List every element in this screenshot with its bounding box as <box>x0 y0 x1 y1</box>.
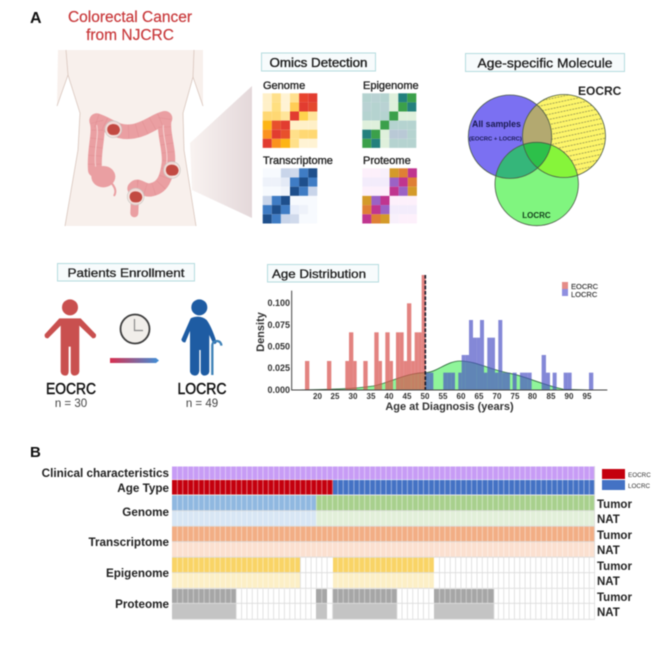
x axis labels: 60 <box>457 392 466 401</box>
label: LOCRC count <box>178 381 226 410</box>
axes <box>292 291 607 390</box>
row labels right: NAT <box>597 545 620 557</box>
chart legend <box>562 282 599 299</box>
x axis labels: 70 <box>493 392 502 401</box>
heading: Age-specific Molecule: Age-specific Molecule <box>478 56 612 70</box>
chart legend: EOCRC <box>571 282 599 291</box>
icon: elderly patient <box>181 299 221 376</box>
x axis labels: 85 <box>547 392 556 401</box>
omics labels: Transcriptome <box>263 155 333 167</box>
row labels left: Clinical characteristics <box>42 467 169 480</box>
row labels left: Transcriptome <box>88 536 169 549</box>
heading: Age Distribution: Age Distribution <box>272 267 366 281</box>
row labels right <box>597 499 632 619</box>
omics labels: Epigenome <box>363 80 419 92</box>
venn diagram: LOCRC <box>522 211 551 220</box>
x axis labels: 50 <box>421 392 430 401</box>
x axis labels: 55 <box>439 392 448 401</box>
row labels left: Genome <box>122 506 169 519</box>
y axis labels <box>267 298 290 395</box>
x axis labels <box>313 392 592 401</box>
row: genome <box>172 496 595 526</box>
heatmap: Transcriptome <box>263 168 317 224</box>
LOCRC bars <box>426 320 593 390</box>
row labels left: Proteome <box>115 598 169 611</box>
row: proteome tumor and NAT <box>172 589 494 620</box>
cutoff line <box>423 275 428 390</box>
x axis labels: 35 <box>367 392 376 401</box>
chart: age distribution histogram <box>255 275 607 413</box>
row: clinical characteristics <box>172 466 595 480</box>
row labels left: Epigenome <box>106 567 169 580</box>
heatmap: Proteome <box>362 168 417 224</box>
x axis labels: 30 <box>349 392 358 401</box>
row: epigenome <box>172 558 434 588</box>
heatmap: Epigenome <box>362 93 416 148</box>
label: EOCRC count: n = 30 <box>55 398 87 410</box>
y axis labels: 0.000 <box>267 385 290 395</box>
x axis labels: 80 <box>528 392 537 401</box>
label: EOCRC count: EOCRC <box>46 381 96 398</box>
density curve <box>295 361 593 390</box>
row labels right: NAT <box>597 607 620 619</box>
row labels right: Tumor <box>597 561 632 573</box>
icon: clock <box>120 314 150 344</box>
y axis labels: 0.075 <box>267 320 290 330</box>
panel: sample coverage heatmap <box>172 466 595 620</box>
venn diagram: (EOCRC + LOCRC) <box>469 136 522 142</box>
illustration: torso with colon <box>57 50 203 226</box>
heading: Omics Detection: Omics Detection <box>270 56 368 70</box>
omics labels <box>263 80 419 167</box>
axis titles: Age at Diagnosis (years) <box>385 401 514 413</box>
label: LOCRC count: LOCRC <box>178 381 226 398</box>
label: EOCRC count <box>46 381 96 410</box>
title: Colorectal Cancer from NJCRC: from NJCRC <box>86 27 174 44</box>
icon: young patient <box>45 299 96 376</box>
row labels left: Age Type <box>117 482 169 495</box>
x axis labels: 20 <box>313 392 322 401</box>
x axis labels: 65 <box>475 392 484 401</box>
heatmap legend <box>602 469 651 490</box>
panel label A: A <box>30 10 42 27</box>
venn diagram: EOCRC <box>578 84 622 98</box>
cell grid <box>177 466 589 588</box>
omics labels: Proteome <box>363 155 411 167</box>
row labels right: NAT <box>597 514 620 526</box>
colon <box>91 118 169 213</box>
title: Colorectal Cancer from NJCRC: Colorectal Cancer <box>68 9 192 26</box>
heatmap legend: LOCRC <box>628 483 650 490</box>
chart: age distribution histogram: Density <box>255 311 267 352</box>
arrow: age progression <box>110 358 159 363</box>
y axis labels: 0.025 <box>267 363 290 373</box>
x axis labels: 40 <box>385 392 394 401</box>
panel label B: B <box>30 444 41 461</box>
heading: Age-specific Molecule <box>466 54 624 72</box>
row labels right: Tumor <box>597 592 632 604</box>
funnel connector <box>190 86 252 218</box>
EOCRC bars <box>305 275 426 390</box>
x axis labels: 45 <box>403 392 412 401</box>
chart legend: LOCRC <box>571 290 598 299</box>
x axis labels: 90 <box>565 392 574 401</box>
tumors <box>105 121 180 205</box>
label: LOCRC count: n = 49 <box>186 398 218 410</box>
y axis labels: 0.100 <box>267 298 290 308</box>
x axis labels: 25 <box>331 392 340 401</box>
row background <box>172 466 595 619</box>
row labels left <box>42 467 169 611</box>
omics labels: Genome <box>263 80 305 92</box>
heading: Omics Detection <box>262 53 376 71</box>
venn diagram: All samples <box>472 119 521 129</box>
row: age type <box>172 480 595 494</box>
title: Colorectal Cancer from NJCRC <box>68 9 192 44</box>
x axis labels: 95 <box>583 392 592 401</box>
row: transcriptome <box>172 526 595 557</box>
y axis labels: 0.050 <box>267 342 290 352</box>
venn diagram <box>468 84 622 226</box>
row labels right: Tumor <box>597 530 632 542</box>
heatmap: Genome <box>263 93 317 148</box>
row labels right: Tumor <box>597 499 632 511</box>
x axis labels: 75 <box>511 392 520 401</box>
heading: Patients Enrollment: Patients Enrollment <box>68 266 185 280</box>
heading: Age Distribution <box>268 264 378 282</box>
row labels right: NAT <box>597 576 620 588</box>
heading: Patients Enrollment <box>58 264 194 281</box>
empty cell outlines <box>172 466 595 619</box>
heatmap legend: EOCRC <box>628 472 651 479</box>
